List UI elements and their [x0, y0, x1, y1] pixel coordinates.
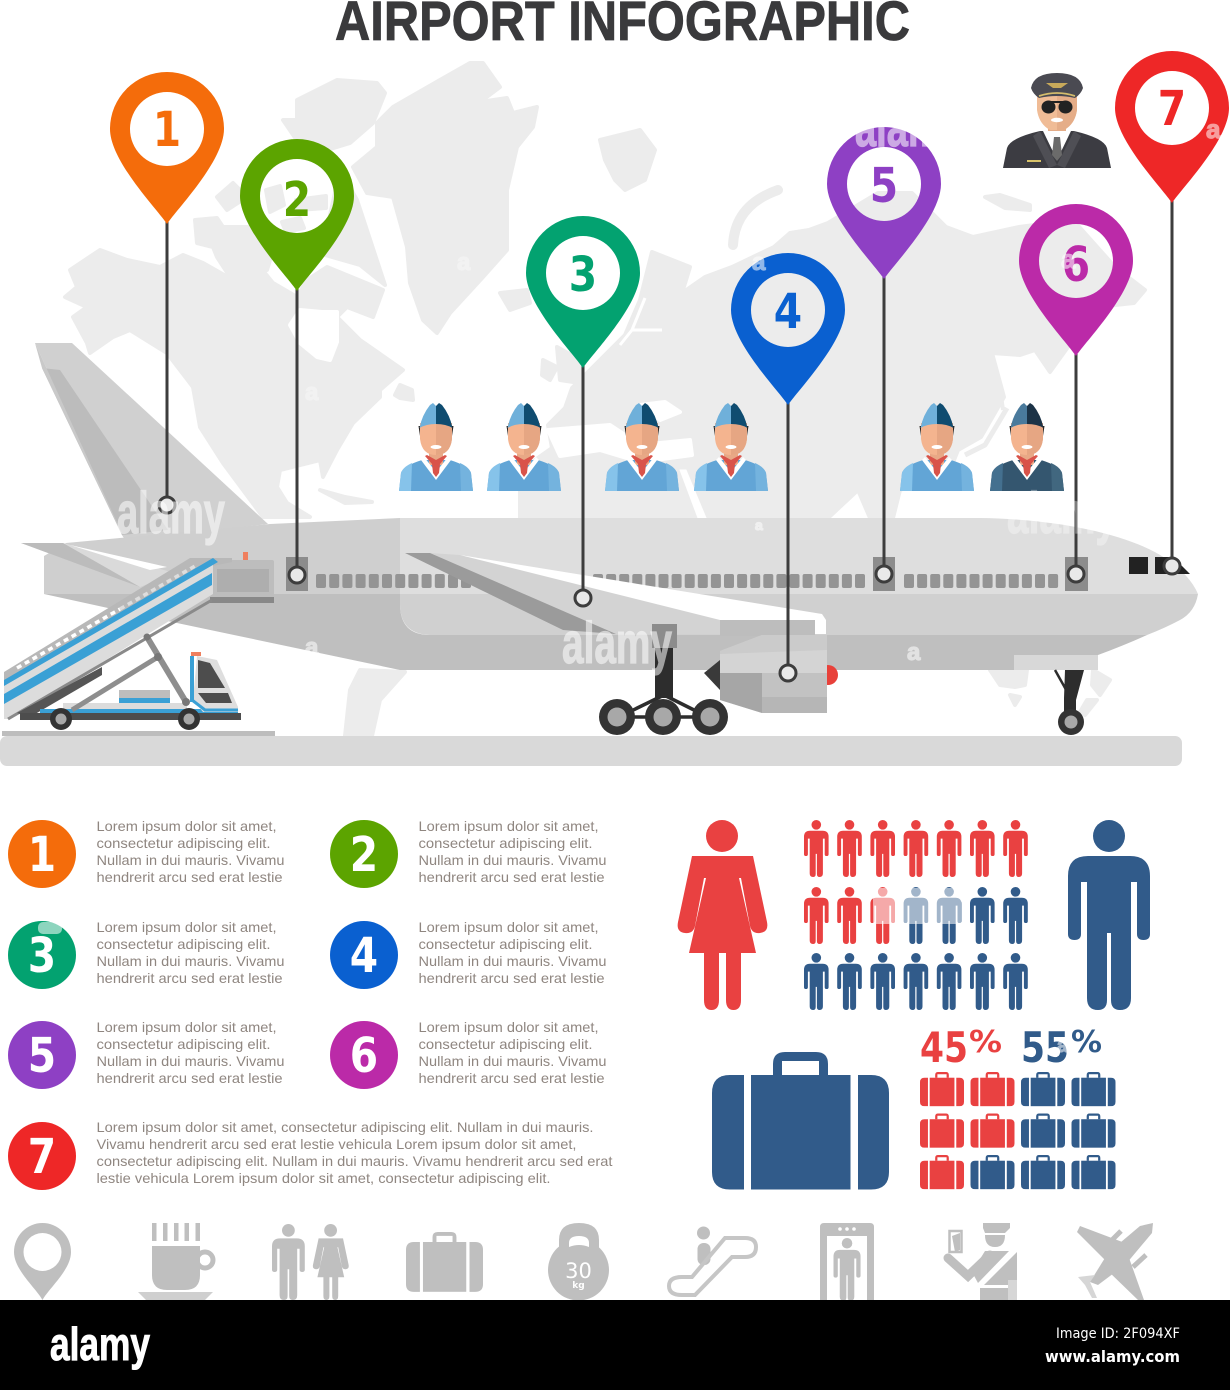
watermark overlay: alamy — [562, 611, 672, 676]
icon: man and woman — [272, 1224, 349, 1300]
legend item 4: consectetur adipiscing elit. — [418, 936, 592, 952]
watermark overlay: alamy — [1007, 481, 1117, 546]
main fuselage and nose — [400, 518, 1198, 670]
legend item 5: Lorem ipsum dolor sit amet, — [96, 1019, 276, 1035]
pin 3 — [526, 216, 640, 368]
pin 4 — [731, 253, 845, 405]
horizontal stabilizer — [21, 543, 175, 587]
rear fuselage — [44, 518, 400, 670]
legend item 5: Nullam in dui mauris. Vivamu — [96, 1053, 284, 1069]
45 percent: 45 — [920, 1023, 968, 1072]
alamy logo: alamy — [50, 1318, 150, 1370]
stair door block — [210, 552, 274, 603]
pin 7: 7 — [1158, 81, 1186, 137]
legend item 4: hendrerit arcu sed erat lestie — [418, 970, 605, 986]
door panels — [286, 557, 1088, 591]
pin 2: 2 — [283, 172, 311, 228]
ground strip — [0, 731, 1182, 766]
icon: kettlebell weight: kg — [572, 1281, 585, 1291]
watermark overlay: a — [752, 249, 766, 276]
legend item 6: hendrerit arcu sed erat lestie — [418, 1070, 605, 1086]
watermark overlay: alamy — [117, 481, 225, 546]
cockpit windows — [1129, 557, 1190, 574]
icon: metal detector — [820, 1223, 874, 1301]
nose landing gear — [1055, 670, 1084, 735]
legend item 7: Lorem ipsum dolor sit amet, consectetur adipiscing elit. Nullam in dui mauris. — [96, 1119, 594, 1135]
leader 1 — [159, 222, 175, 513]
legend item 2: hendrerit arcu sed erat lestie — [418, 869, 605, 885]
legend item 1: 1 — [28, 827, 56, 883]
watermark overlay: a — [1206, 114, 1221, 144]
watermark overlay: a — [1057, 1035, 1069, 1057]
attendant 1 — [399, 403, 473, 491]
55 percent: 55 — [1021, 1023, 1069, 1072]
icon: escalator — [669, 1226, 756, 1295]
legend item 3: Lorem ipsum dolor sit amet, — [96, 919, 276, 935]
legend item 4 — [330, 919, 606, 989]
leader 5 — [876, 277, 892, 582]
legend item 6: Nullam in dui mauris. Vivamu — [418, 1053, 606, 1069]
watermark overlay: a — [305, 379, 319, 406]
bottom credit bar — [0, 1300, 1230, 1390]
legend item 1: consectetur adipiscing elit. — [96, 835, 270, 851]
attendant 3 — [605, 403, 679, 491]
large man icon — [1068, 820, 1150, 1010]
legend item 2 — [330, 818, 606, 888]
pin 5 — [827, 127, 941, 279]
leader lines and anchor points — [159, 201, 1180, 681]
wing — [405, 553, 826, 634]
45 percent: % — [969, 1025, 1002, 1060]
pin 6 — [1019, 204, 1133, 356]
legend item 6 — [330, 1019, 606, 1089]
leader 4 — [780, 403, 796, 681]
legend item 3: 3 — [28, 928, 56, 984]
watermark overlay: a — [457, 249, 471, 276]
legend item 5: hendrerit arcu sed erat lestie — [96, 1070, 283, 1086]
map pins — [110, 51, 1229, 405]
leader 7 — [1164, 201, 1180, 574]
pin 1: 1 — [153, 102, 181, 158]
icon: kettlebell weight: 30 — [565, 1259, 592, 1283]
truck wheels — [50, 708, 200, 730]
leader 2 — [289, 289, 305, 583]
watermark overlay: a — [907, 639, 921, 666]
attendant 4 — [694, 403, 768, 491]
legend item 1: Nullam in dui mauris. Vivamu — [96, 852, 284, 868]
watermark overlay: a — [305, 634, 319, 661]
pin 3: 3 — [569, 247, 597, 303]
legend item 6: 6 — [350, 1028, 378, 1084]
numbered legend — [8, 818, 613, 1190]
airplane — [21, 343, 1198, 735]
icon: airplane — [1077, 1223, 1153, 1300]
pilot — [1003, 73, 1111, 168]
legend item 3: Nullam in dui mauris. Vivamu — [96, 953, 284, 969]
suitcase pictogram grid — [920, 1072, 1116, 1189]
legend item 3: hendrerit arcu sed erat lestie — [96, 970, 283, 986]
bottom icon row — [14, 1223, 1153, 1301]
icon: customs officer — [948, 1223, 1017, 1300]
watermark overlay — [38, 96, 1221, 1057]
pin 7 — [1115, 51, 1229, 203]
icon: location pin — [14, 1223, 71, 1300]
passenger gender statistics — [678, 820, 1150, 1010]
tail fin — [35, 343, 268, 540]
watermark overlay: a — [1061, 244, 1076, 274]
attendant 5 — [900, 403, 974, 491]
luggage statistics — [712, 1023, 1116, 1190]
legend item 2: Lorem ipsum dolor sit amet, — [418, 818, 598, 834]
leader 3 — [575, 366, 591, 606]
passenger windows — [316, 574, 1058, 588]
legend item 4: 4 — [350, 928, 378, 984]
legend item 5 — [8, 1019, 284, 1089]
people pictogram grid — [804, 820, 1028, 1010]
site url: www.alamy.com — [1045, 1347, 1180, 1366]
legend item 3 — [8, 919, 284, 989]
stair flight — [4, 558, 232, 719]
legend item 7: consectetur adipiscing elit. Nullam in dui mauris. Vivamu hendrerit arcu sed erat — [96, 1153, 613, 1169]
legend item 6: Lorem ipsum dolor sit amet, — [418, 1019, 598, 1035]
legend item 7: lestie vehicula Lorem ipsum dolor sit amet, consectetur adipiscing elit. — [96, 1170, 550, 1186]
legend item 5: consectetur adipiscing elit. — [96, 1036, 270, 1052]
world map background — [65, 63, 1145, 736]
legend item 2: consectetur adipiscing elit. — [418, 835, 592, 851]
pin 4: 4 — [774, 284, 802, 340]
legend item 5: 5 — [28, 1028, 56, 1084]
truck cab — [190, 652, 238, 712]
icon: coffee cup — [138, 1223, 213, 1300]
legend item 1 — [8, 818, 284, 888]
legend item 7: Vivamu hendrerit arcu sed erat lestie vehicula Lorem ipsum dolor sit amet, — [96, 1136, 576, 1152]
legend item 7: 7 — [28, 1129, 56, 1185]
legend item 3: consectetur adipiscing elit. — [96, 936, 270, 952]
icon: suitcase — [406, 1232, 483, 1292]
large suitcase icon — [712, 1052, 889, 1190]
legend item 6: consectetur adipiscing elit. — [418, 1036, 592, 1052]
image id: Image ID: 2F094XF — [1056, 1326, 1180, 1342]
cabin crew — [399, 403, 1064, 491]
legend item 1: Lorem ipsum dolor sit amet, — [96, 818, 276, 834]
large woman icon — [678, 820, 767, 1010]
truck chassis and arms — [20, 634, 241, 720]
legend item 1: hendrerit arcu sed erat lestie — [96, 869, 283, 885]
legend item 2: 2 — [350, 827, 378, 883]
leader 6 — [1068, 354, 1084, 582]
legend item 4: Nullam in dui mauris. Vivamu — [418, 953, 606, 969]
pin 2 — [240, 139, 354, 291]
55 percent: % — [1071, 1025, 1102, 1060]
attendant 6 dark uniform — [990, 403, 1064, 491]
main landing gear — [599, 624, 728, 735]
pin 5: 5 — [870, 158, 898, 214]
legend item 2: Nullam in dui mauris. Vivamu — [418, 852, 606, 868]
engine — [704, 620, 838, 713]
legend item 4: Lorem ipsum dolor sit amet, — [418, 919, 598, 935]
icon: kettlebell weight — [548, 1223, 609, 1300]
pin 1 — [110, 72, 224, 224]
attendant 2 — [487, 403, 561, 491]
boarding stairs truck — [4, 552, 274, 730]
watermark overlay: alamy — [855, 96, 963, 158]
pin 6: 6 — [1062, 237, 1090, 293]
watermark overlay: a — [755, 517, 763, 533]
legend item 7 — [8, 1119, 613, 1190]
